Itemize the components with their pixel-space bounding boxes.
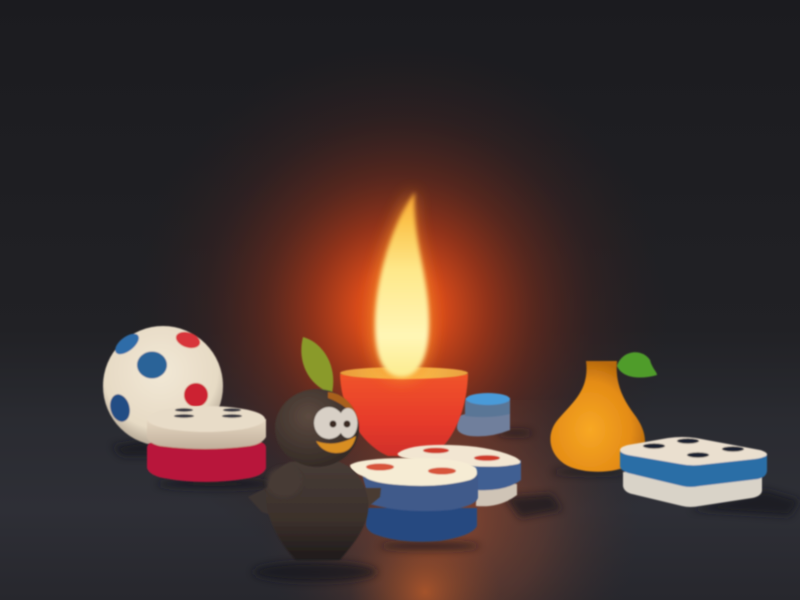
duck eyes (314, 407, 344, 439)
duck wing and foot (248, 485, 280, 518)
duck crest (328, 392, 358, 420)
duck head (275, 389, 359, 467)
duck figure (248, 337, 381, 560)
shadows on the floor (112, 430, 800, 582)
candle cup (340, 367, 468, 456)
leaf on duck (301, 337, 333, 393)
blue stacked discs behind cup (457, 393, 510, 436)
pear (550, 352, 657, 472)
cup rim (340, 367, 468, 379)
duck beak (316, 436, 356, 453)
orange glow behind flame (120, 30, 680, 590)
spotted ball (103, 326, 223, 446)
flame (372, 190, 431, 379)
warm light on floor (260, 400, 640, 600)
duck wing bump (267, 467, 301, 497)
stacked discs, front (350, 458, 478, 542)
white red-dotted disc, back (398, 445, 521, 506)
blue and cream domino block (620, 437, 767, 507)
red and cream stack near ball (147, 406, 266, 482)
duck body (266, 460, 369, 560)
hot spot on floor (345, 515, 505, 600)
